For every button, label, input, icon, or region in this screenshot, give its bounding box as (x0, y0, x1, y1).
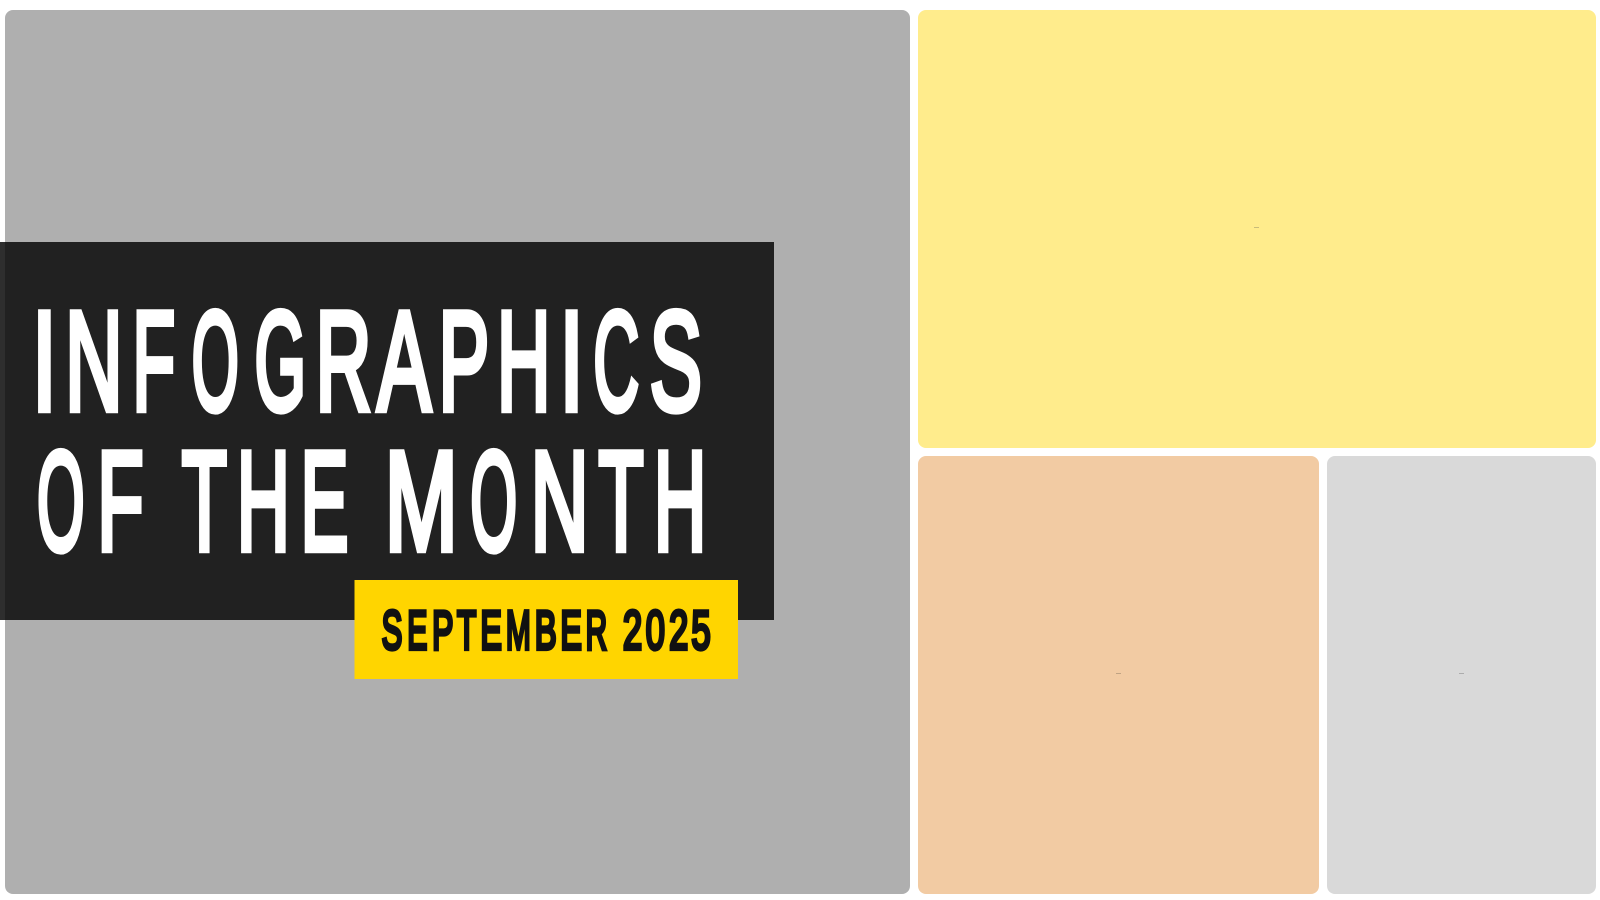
title line 1: I (560, 282, 584, 440)
date badge (354, 580, 738, 679)
badge text: S (382, 599, 402, 661)
banner left edge (0, 242, 5, 620)
badge text: P (432, 599, 453, 661)
title line 2: N (531, 422, 589, 580)
title line 2: E (301, 422, 348, 580)
title line 2: T (598, 422, 644, 580)
title line 2: M (385, 422, 458, 580)
badge text: 2 (623, 599, 642, 661)
title line 1: G (255, 282, 306, 440)
badge text: 2 (669, 599, 688, 661)
title line 2: H (237, 422, 290, 580)
mark: yellow tile centre tick (1254, 227, 1259, 228)
badge text: E (407, 599, 427, 661)
title line 1: P (439, 282, 489, 440)
title line 1: H (497, 282, 550, 440)
title banner (0, 242, 774, 620)
badge text: B (535, 599, 557, 661)
title line 2: O (37, 422, 84, 580)
title line 2: T (182, 422, 227, 580)
mark: peach tile centre tick (1116, 673, 1121, 674)
title line 1: I (32, 282, 57, 440)
badge text: T (457, 599, 476, 661)
badge text: E (480, 599, 502, 661)
title line 1: C (593, 282, 639, 440)
title (32, 282, 706, 580)
title line 2: F (97, 422, 144, 580)
title line 1: O (192, 282, 239, 440)
mark: light grey tile centre tick (1459, 673, 1464, 674)
badge text: 5 (691, 599, 711, 661)
title line 2: O (470, 422, 517, 580)
badge text: E (560, 599, 582, 661)
title line 1: A (377, 282, 431, 440)
panel: yellow top-right tile (918, 10, 1596, 448)
badge text: 0 (646, 599, 665, 661)
badge text: M (506, 599, 531, 661)
badge background (354, 580, 738, 679)
title line 1: S (650, 282, 702, 440)
title line 1: F (132, 282, 175, 440)
panel: peach bottom tile (918, 456, 1319, 894)
title line 2: H (654, 422, 706, 580)
panel: light grey bottom-right tile (1327, 456, 1596, 894)
title line 1: R (316, 282, 371, 440)
badge text: R (586, 599, 607, 661)
title line 1: N (65, 282, 123, 440)
panel: grey left tile (5, 10, 910, 894)
